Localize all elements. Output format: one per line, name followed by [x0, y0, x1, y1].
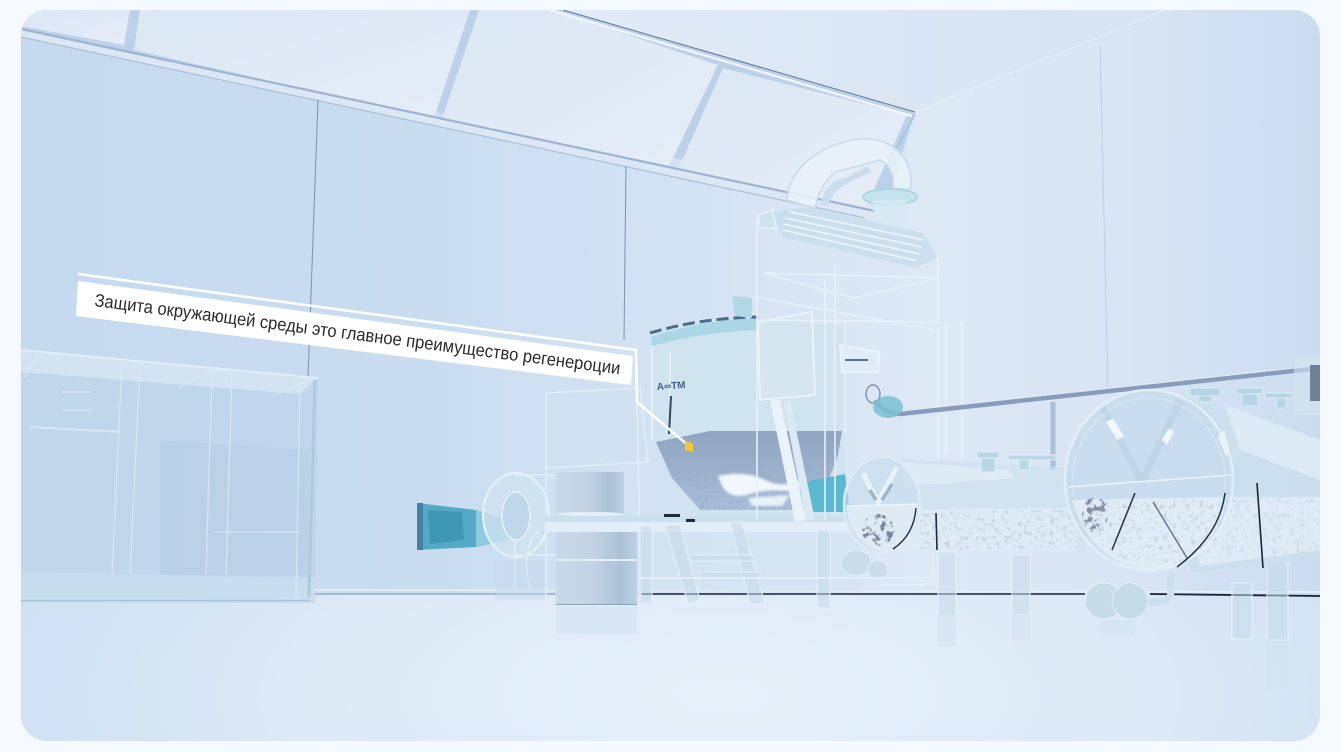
- support frame left: [546, 388, 648, 606]
- bottom valves: [640, 550, 1171, 619]
- walls: [21, 10, 1320, 600]
- small wheel: [844, 457, 920, 553]
- callout marker: [685, 441, 693, 452]
- glass cabinet: [21, 350, 318, 603]
- big cylinder: [1183, 388, 1320, 572]
- small cylinder liquid texture: [920, 510, 1078, 550]
- ceiling beam: [21, 10, 1165, 218]
- hopper box: [732, 296, 815, 522]
- ceiling light panels: [21, 10, 907, 212]
- floor: [21, 595, 1320, 741]
- big cylinder liquid texture: [1220, 497, 1320, 560]
- floor reflections: [556, 606, 1288, 646]
- liquid texture: [698, 466, 834, 510]
- teal motor: [417, 473, 556, 600]
- big wheel: [1065, 390, 1233, 570]
- ceiling band: [21, 10, 915, 200]
- foam: [718, 474, 805, 496]
- teal pump: [804, 474, 850, 512]
- tank label: A∞TM: [656, 380, 686, 393]
- pipe: [866, 365, 1320, 470]
- wall seams: [308, 45, 1108, 390]
- right tower: [1294, 365, 1320, 401]
- back ceiling: [566, 10, 748, 62]
- callout label box: [76, 281, 633, 385]
- small cylinder: [890, 452, 1085, 552]
- dark liquid: [656, 431, 842, 510]
- table: [545, 514, 865, 592]
- barrel: [556, 472, 637, 605]
- condenser tower: [755, 139, 962, 520]
- tank: [650, 317, 845, 520]
- callout text: Защита окружающей среды это главное преимущество регенероции: [93, 290, 622, 378]
- floor line: [21, 590, 1320, 600]
- callout leader line: [78, 274, 689, 446]
- stairs and legs: [640, 522, 1288, 640]
- big wheel liquid texture: [1085, 500, 1225, 566]
